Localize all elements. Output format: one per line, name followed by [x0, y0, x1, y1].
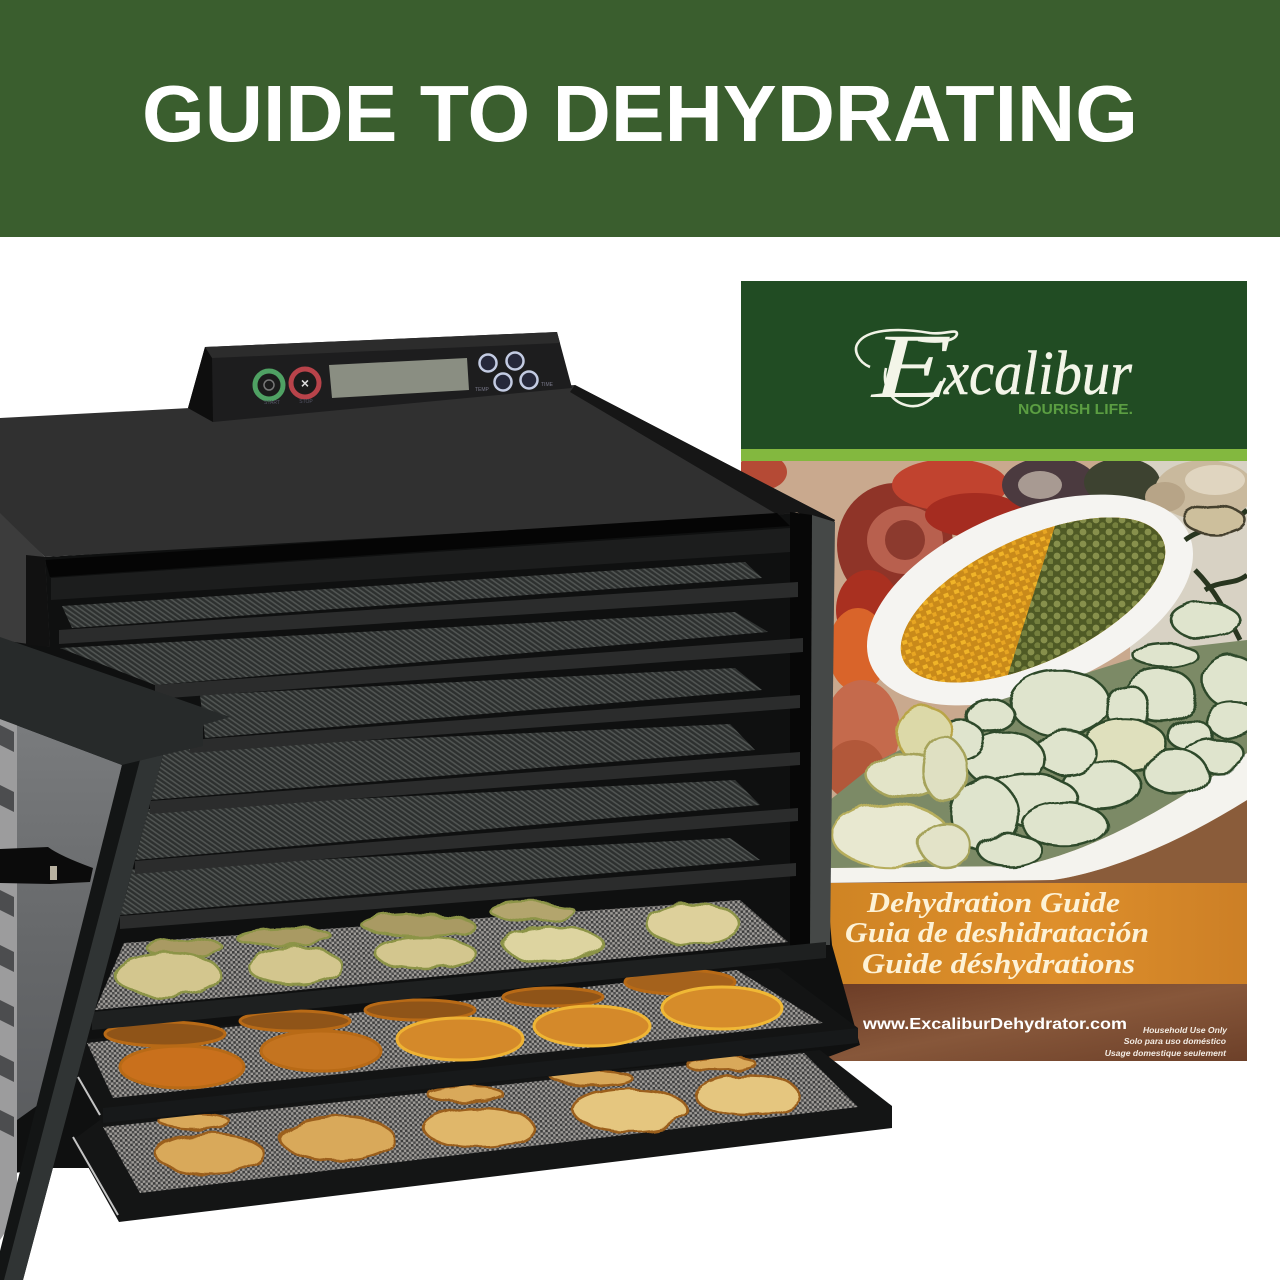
dark trays	[60, 562, 768, 915]
left corner post	[0, 513, 50, 647]
lid front lip	[45, 513, 790, 577]
control panel	[188, 332, 572, 422]
right corner post	[790, 512, 835, 950]
start button	[255, 371, 283, 406]
open door	[0, 637, 230, 1280]
dehydrator appliance	[0, 332, 892, 1280]
header banner	[0, 0, 1280, 237]
lime strip	[741, 449, 1247, 462]
tray B front rail	[103, 1028, 858, 1123]
dried carrots	[832, 608, 900, 794]
title: GUIDE TO DEHYDRATING	[142, 69, 1138, 158]
tagline: NOURISH LIFE.	[1018, 401, 1133, 418]
door vents	[0, 725, 14, 1137]
door strut	[0, 755, 163, 1280]
Excalibur logo: xcalibur	[943, 340, 1133, 408]
dried tomatoes	[741, 461, 1022, 620]
start button: START	[264, 400, 280, 406]
door window left light stripe	[0, 719, 17, 1240]
booklet green masthead	[741, 281, 1247, 449]
dried aubergine and greens	[1002, 461, 1160, 508]
lid top	[0, 385, 835, 557]
open tray C with pear slices	[73, 1050, 892, 1222]
household use note: Solo para uso doméstico	[1124, 1036, 1226, 1046]
household use note: Household Use Only	[1143, 1025, 1228, 1035]
display screen	[329, 358, 469, 398]
door window	[0, 719, 122, 1215]
white bowl	[867, 494, 1193, 706]
stop button	[291, 369, 319, 405]
booklet food photo	[737, 452, 1260, 883]
wood footer	[826, 984, 1247, 1061]
dried mushrooms	[1145, 461, 1247, 517]
band title lines: Guide déshydrations	[862, 948, 1135, 980]
button labels	[475, 382, 554, 393]
button labels: TIME	[541, 382, 554, 388]
band title lines	[845, 887, 1149, 980]
Excalibur logo: E	[869, 315, 952, 417]
band title lines: Dehydration Guide	[866, 887, 1120, 919]
open tray B with orange slices	[76, 968, 858, 1125]
stop button: ×	[301, 375, 309, 391]
panel: Excalibur guide booklet	[737, 281, 1260, 1061]
peas	[1008, 518, 1166, 675]
dried cucumber and squash slices	[832, 506, 1260, 867]
orange title band	[826, 883, 1247, 984]
right side greens	[1185, 510, 1247, 640]
temperature and time buttons	[480, 352, 538, 390]
tray rails	[59, 582, 803, 929]
plate and wood	[830, 640, 1247, 883]
stop button: STOP	[299, 399, 313, 405]
website: www.ExcaliburDehydrator.com	[862, 1016, 1127, 1033]
top rail	[51, 528, 790, 600]
button labels: TEMP	[475, 387, 490, 393]
corn	[900, 518, 1166, 682]
household use note	[1105, 1025, 1228, 1058]
band title lines: Guia de deshidratación	[845, 917, 1149, 949]
dark body	[0, 510, 860, 1175]
door top frame	[0, 637, 230, 765]
door handle	[0, 847, 93, 884]
Excalibur logo	[856, 315, 1133, 418]
household use note: Usage domestique seulement	[1105, 1048, 1227, 1058]
open tray A with apple slices	[92, 900, 826, 1030]
